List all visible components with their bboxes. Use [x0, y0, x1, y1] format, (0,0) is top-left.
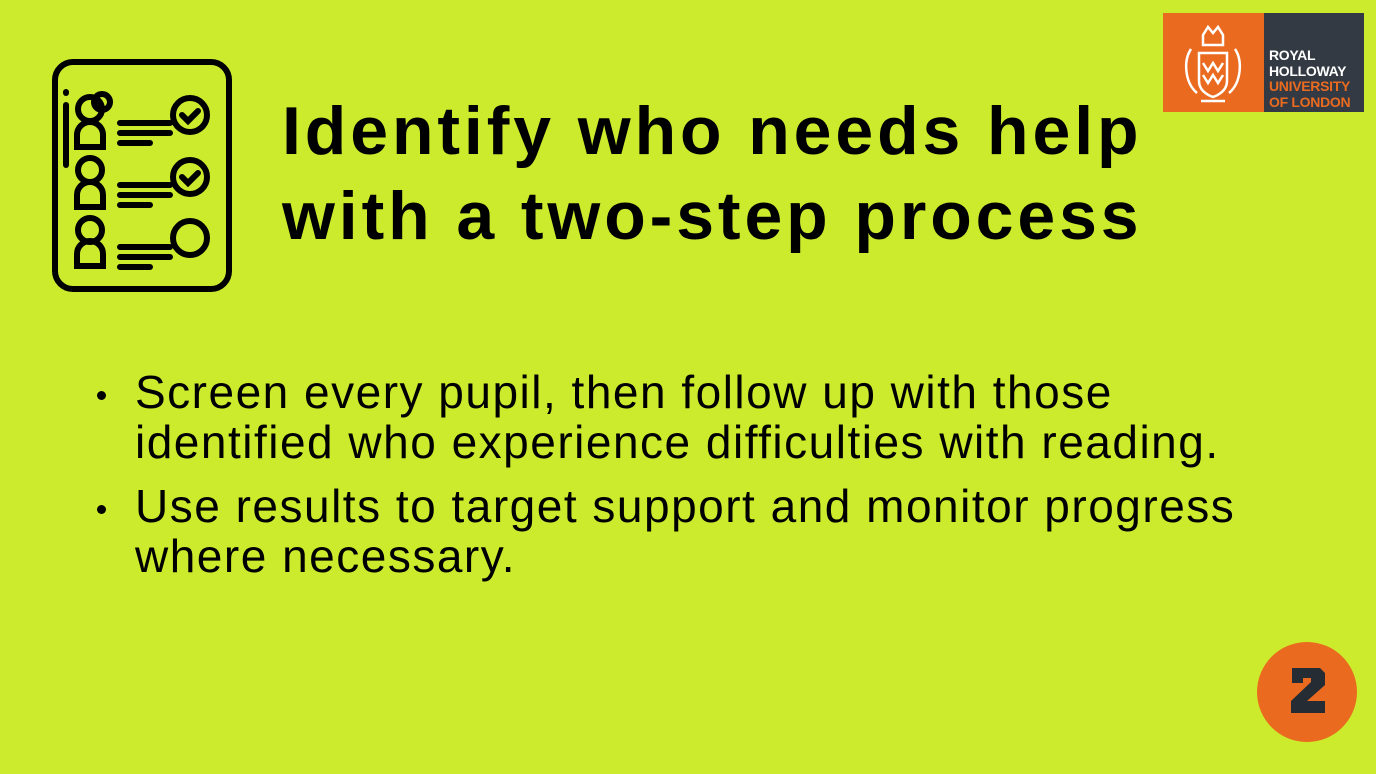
bullet 2: where necessary.: [135, 530, 516, 582]
title: with a two-step process: [282, 178, 1143, 254]
logo text: ROYAL: [1269, 47, 1315, 63]
bullet 1: identified who experience difficulties with reading.: [135, 416, 1220, 468]
logo text: OF LONDON: [1269, 94, 1350, 110]
page number badge: [1257, 642, 1357, 742]
bullet 1: Screen every pupil, then follow up with those: [135, 366, 1113, 418]
icon: crest: [1184, 24, 1242, 102]
icon: checklist: [52, 59, 232, 292]
title: [282, 93, 1143, 254]
bullet list: [97, 366, 1235, 582]
logo text: [1269, 47, 1350, 110]
bullet 1: [97, 367, 1347, 467]
title: Identify who needs help: [282, 93, 1142, 169]
logo text: HOLLOWAY: [1269, 62, 1346, 78]
bullet 2: [97, 481, 1347, 581]
logo: Royal Holloway: [1163, 13, 1364, 112]
bullet 2: Use results to target support and monitor progress: [135, 480, 1235, 532]
logo text: UNIVERSITY: [1269, 78, 1350, 94]
number 2: [1291, 668, 1325, 713]
